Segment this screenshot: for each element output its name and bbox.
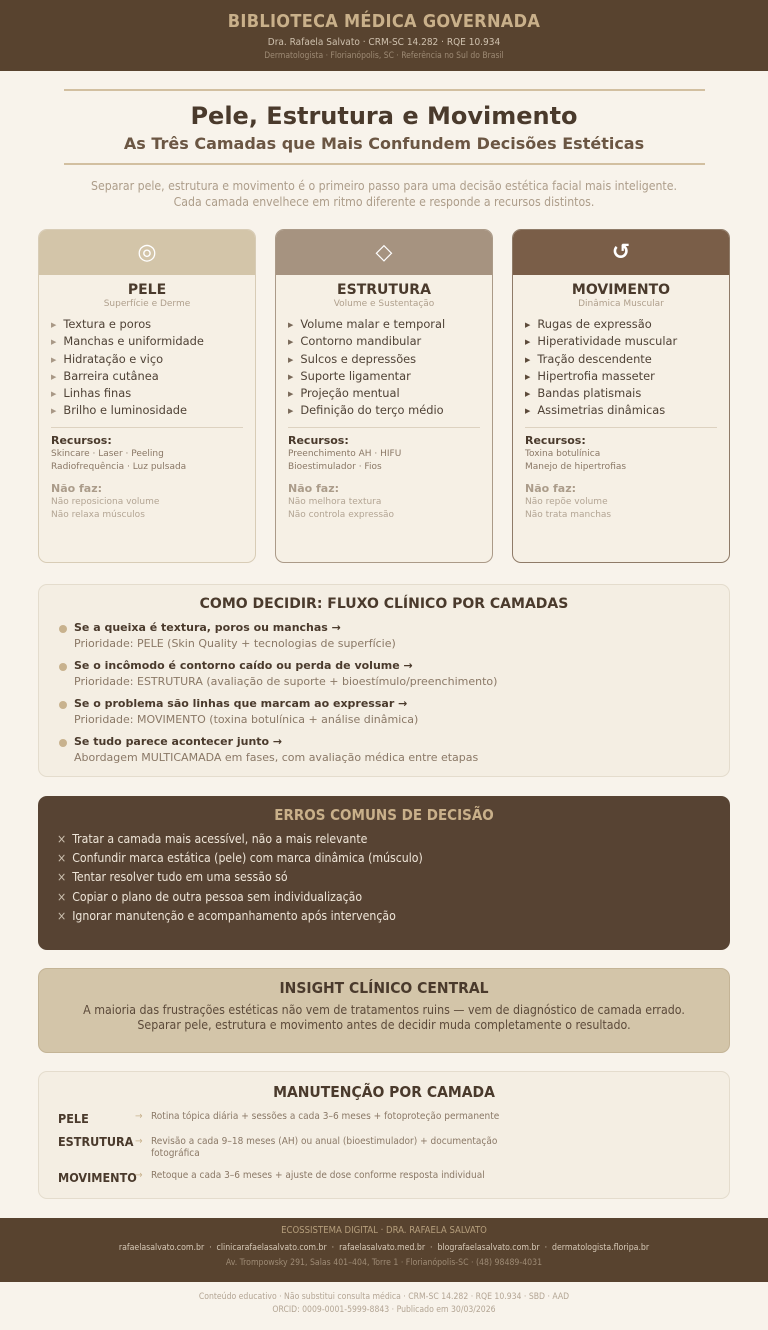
panel: decision flow (38, 584, 730, 777)
estrutura heading: ESTRUTURA (337, 282, 431, 298)
insight text: Separar pele, estrutura e movimento antes de decidir muda completamente o resultado. (137, 1018, 631, 1032)
panel: pele (38, 229, 256, 563)
panel: maintenance: Revisão a cada 9–18 meses (AH) ou anual (bioestimulador) + documentação fotográfica (151, 1136, 497, 1159)
estrutura nao faz: Não melhora textura (288, 497, 381, 507)
panel: clinical insight (38, 968, 730, 1053)
maintenance pele row (58, 1111, 499, 1126)
movimento recursos (525, 434, 626, 472)
icon: diamond (276, 230, 492, 275)
movimento list: ▶ Hipertrofia masseter (525, 369, 655, 383)
movimento heading: Dinâmica Muscular (578, 299, 664, 309)
panel: maintenance: Rotina tópica diária + sessões a cada 3–6 meses + fotoproteção permanente (151, 1111, 499, 1122)
panel: maintenance: → (135, 1111, 143, 1122)
panel: maintenance (38, 1071, 730, 1199)
movimento recursos: Manejo de hipertrofias (525, 462, 626, 472)
movimento list: ▶ Rugas de expressão (525, 317, 652, 331)
panel: maintenance: MOVIMENTO (58, 1170, 137, 1185)
decision steps: Prioridade: PELE (Skin Quality + tecnologias de superfície) (74, 637, 396, 650)
intro text (91, 179, 677, 209)
movimento nao faz: Não trata manchas (525, 510, 611, 520)
icon: rotate arrow: ↺ (612, 240, 630, 265)
header credentials: Dra. Rafaela Salvato · CRM-SC 14.282 · RQE 10.934 (268, 37, 500, 48)
header band (0, 0, 768, 71)
pele list: ▶ Textura e poros (51, 317, 151, 331)
panel: movimento (512, 229, 730, 563)
errors list: × Ignorar manutenção e acompanhamento após intervenção (57, 909, 396, 923)
estrutura list: ▶ Suporte ligamentar (288, 369, 411, 383)
maintenance title: MANUTENÇÃO POR CAMADA (273, 1083, 495, 1101)
maintenance estrutura row (58, 1134, 497, 1159)
pele heading: PELE (128, 282, 166, 298)
estrutura heading: Volume e Sustentação (334, 299, 434, 309)
movimento heading (572, 282, 670, 309)
movimento nao faz (525, 482, 611, 520)
pele recursos: Recursos: (51, 434, 112, 447)
estrutura list: ▶ Definição do terço médio (288, 403, 444, 417)
movimento heading: MOVIMENTO (572, 282, 670, 298)
decision steps: Se o problema são linhas que marcam ao expressar → (74, 697, 407, 710)
panel: maintenance: Retoque a cada 3–6 meses + ajuste de dose conforme resposta individual (151, 1170, 485, 1181)
pele nao faz: Não faz: (51, 482, 102, 495)
pele heading (104, 282, 190, 309)
estrutura list (288, 317, 445, 417)
insight title: INSIGHT CLÍNICO CENTRAL (279, 979, 488, 997)
panel: maintenance: → (135, 1136, 143, 1147)
movimento list: ▶ Bandas platismais (525, 386, 641, 400)
pele nao faz (51, 482, 159, 520)
movimento list (525, 317, 678, 417)
errors list: × Copiar o plano de outra pessoa sem individualização (57, 890, 362, 904)
icon: target (39, 230, 255, 275)
movimento list: ▶ Hiperatividade muscular (525, 334, 677, 348)
panel: estrutura (275, 229, 493, 563)
pele heading: Superfície e Derme (104, 299, 190, 309)
movimento recursos: Recursos: (525, 434, 586, 447)
pele list: ▶ Manchas e uniformidade (51, 334, 204, 348)
icon: diamond: ◇ (376, 240, 392, 265)
errors title: ERROS COMUNS DE DECISÃO (274, 806, 494, 824)
errors list (57, 832, 423, 923)
pele nao faz: Não relaxa músculos (51, 510, 145, 520)
maintenance movimento row (58, 1170, 485, 1185)
pele nao faz: Não reposiciona volume (51, 497, 159, 507)
disclaimer: ORCID: 0009-0001-5999-8843 · Publicado em 30/03/2026 (272, 1305, 496, 1315)
panel: common errors (38, 796, 730, 950)
movimento list: ▶ Assimetrias dinâmicas (525, 403, 665, 417)
estrutura list: ▶ Sulcos e depressões (288, 352, 416, 366)
decision steps: Abordagem MULTICAMADA em fases, com avaliação médica entre etapas (74, 751, 478, 764)
estrutura recursos: Recursos: (288, 434, 349, 447)
pele recursos: Radiofrequência · Luz pulsada (51, 462, 186, 472)
estrutura nao faz: Não faz: (288, 482, 339, 495)
insight text: A maioria das frustrações estéticas não vem de tratamentos ruins — vem de diagnóstico de camada errado. (83, 1003, 685, 1017)
pele recursos (51, 434, 186, 472)
decision title: COMO DECIDIR: FLUXO CLÍNICO POR CAMADAS (200, 596, 568, 612)
header location: Dermatologista · Florianópolis, SC · Referência no Sul do Brasil (264, 51, 504, 61)
pele list (51, 317, 204, 417)
pele recursos: Skincare · Laser · Peeling (51, 449, 164, 459)
pele list: ▶ Hidratação e viço (51, 352, 163, 366)
decision steps (59, 621, 497, 764)
main title: Pele, Estrutura e Movimento (190, 102, 578, 130)
movimento recursos: Toxina botulínica (525, 449, 600, 459)
header title: BIBLIOTECA MÉDICA GOVERNADA (228, 11, 540, 32)
estrutura heading (334, 282, 434, 309)
estrutura nao faz (288, 482, 394, 520)
errors list: × Confundir marca estática (pele) com marca dinâmica (músculo) (57, 851, 423, 865)
disclaimer (199, 1292, 569, 1315)
pele list: ▶ Brilho e luminosidade (51, 403, 187, 417)
decision steps: Prioridade: MOVIMENTO (toxina botulínica + análise dinâmica) (74, 713, 418, 726)
panel: maintenance: PELE (58, 1111, 89, 1126)
decision steps: Prioridade: ESTRUTURA (avaliação de suporte + bioestímulo/preenchimento) (74, 675, 497, 688)
estrutura list: ▶ Contorno mandibular (288, 334, 421, 348)
intro text: Separar pele, estrutura e movimento é o primeiro passo para uma decisão estética facial mais inteligente. (91, 179, 677, 193)
disclaimer: Conteúdo educativo · Não substitui consulta médica · CRM-SC 14.282 · RQE 10.934 · SBD · AAD (199, 1292, 569, 1302)
estrutura nao faz: Não controla expressão (288, 510, 394, 520)
icon: target: ◎ (137, 240, 157, 265)
errors list: × Tentar resolver tudo em uma sessão só (57, 870, 288, 884)
decision steps: Se tudo parece acontecer junto → (74, 735, 282, 748)
movimento nao faz: Não repõe volume (525, 497, 608, 507)
footer band (0, 1218, 768, 1282)
footer address: Av. Trompowsky 291, Salas 401–404, Torre 1 · Florianópolis-SC · (48) 98489-4031 (226, 1258, 542, 1268)
subtitle: As Três Camadas que Mais Confundem Decisões Estéticas (124, 134, 644, 153)
estrutura recursos: Preenchimento AH · HIFU (288, 449, 401, 459)
estrutura list: ▶ Projeção mentual (288, 386, 400, 400)
footer links: rafaelasalvato.com.br · clinicarafaelasalvato.com.br · rafaelasalvato.med.br · blografaelasalvato.com.br · dermatologista.floripa.br (119, 1243, 649, 1253)
estrutura recursos: Bioestimulador · Fios (288, 462, 382, 472)
pele list: ▶ Barreira cutânea (51, 369, 159, 383)
estrutura list: ▶ Volume malar e temporal (288, 317, 445, 331)
estrutura recursos (288, 434, 401, 472)
panel: maintenance: → (135, 1170, 143, 1181)
intro text: Cada camada envelhece em ritmo diferente e responde a recursos distintos. (174, 195, 594, 209)
errors list: × Tratar a camada mais acessível, não a mais relevante (57, 832, 367, 846)
decision steps: Se a queixa é textura, poros ou manchas → (74, 621, 341, 634)
pele list: ▶ Linhas finas (51, 386, 131, 400)
insight text (83, 1003, 685, 1032)
movimento list: ▶ Tração descendente (525, 352, 652, 366)
panel: maintenance: ESTRUTURA (58, 1134, 133, 1149)
decision steps: Se o incômodo é contorno caído ou perda de volume → (74, 659, 413, 672)
icon: rotate arrow (513, 230, 729, 275)
footer title: ECOSSISTEMA DIGITAL · DRA. RAFAELA SALVATO (281, 1225, 487, 1236)
movimento nao faz: Não faz: (525, 482, 576, 495)
